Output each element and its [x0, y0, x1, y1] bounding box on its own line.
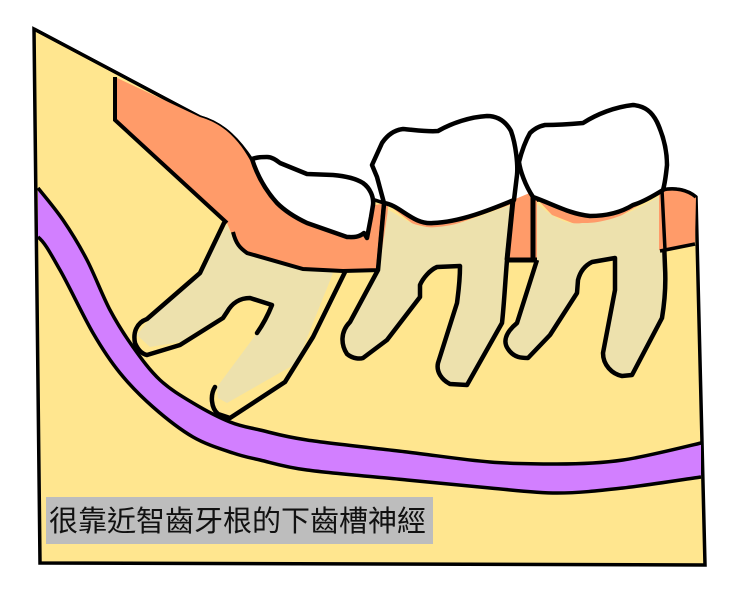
- nerve canal: [38, 188, 701, 493]
- gum outline: [115, 77, 384, 271]
- wisdom tooth crown: [252, 157, 373, 238]
- third molar root: [505, 196, 665, 376]
- wisdom tooth root outline: [134, 223, 345, 418]
- third molar crown: [519, 105, 667, 216]
- gum between molars: [506, 192, 537, 260]
- gum between molars outline: [506, 197, 538, 260]
- second molar root: [342, 205, 511, 386]
- second molar gum sliver: [386, 202, 512, 230]
- white area above the jaw: [60, 0, 740, 200]
- gum around wisdom tooth: [115, 77, 388, 271]
- jaw top edge: [34, 29, 252, 160]
- second molar crown: [372, 116, 517, 223]
- right gum outline: [660, 189, 696, 251]
- second molar root outline: [342, 202, 513, 385]
- caption: 很靠近智齒牙根的下齒槽神經: [49, 505, 426, 538]
- third molar root outline: [505, 190, 665, 376]
- third molar gum sliver: [536, 192, 662, 224]
- wisdom tooth roots: [137, 224, 333, 403]
- right gum: [659, 189, 696, 250]
- caption: [46, 497, 433, 544]
